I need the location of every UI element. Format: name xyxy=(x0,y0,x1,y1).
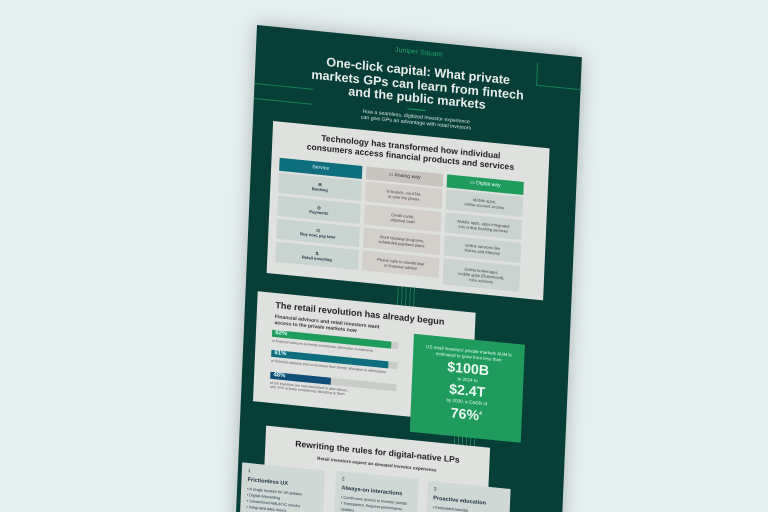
table: Mobile apps, apps integrated xyxy=(458,219,510,229)
callout: AUM growth: US retail investors' private markets AUM is estimated to grow from less than xyxy=(426,344,512,362)
card: proactive education xyxy=(424,481,511,512)
card: frictionless UX: • Digital onboarding xyxy=(247,493,280,500)
callout: AUM growth: by 2030, a CAGR of xyxy=(446,397,487,406)
bar chart: of financial advisors currently incorporate alternative investments xyxy=(272,339,373,353)
table: ⊡ xyxy=(316,228,320,233)
subheading: Retail investors expect an elevated investor experience xyxy=(317,456,437,473)
decorative connector lines xyxy=(453,436,476,456)
table: Service xyxy=(312,164,329,172)
table: ⊞ xyxy=(318,182,322,187)
card: proactive education: Proactive education xyxy=(433,495,486,507)
table: mobile apps (Robinhood), xyxy=(458,270,505,280)
bar chart: of financial advisors plan to increase their clients' allocation to alternatives xyxy=(271,359,386,374)
table: Buy now, pay later xyxy=(300,231,336,240)
table: In branch, via ATM, xyxy=(386,188,421,197)
table: Payments xyxy=(309,209,329,216)
table: into online banking services xyxy=(458,224,508,234)
subheading: Financial advisors and retail investors want xyxy=(275,314,380,330)
table: Banking xyxy=(312,186,328,193)
panel heading: consumers access financial products and services xyxy=(307,141,514,171)
heading: The retail revolution has already begun xyxy=(275,300,445,327)
table: Credit cards, xyxy=(391,212,414,219)
table: online account access xyxy=(464,201,504,210)
bar chart: 92% xyxy=(275,330,287,337)
table: Online services like xyxy=(465,242,500,251)
brand logo: Juniper Square xyxy=(395,47,443,58)
table: Mobile apps, xyxy=(473,197,496,204)
callout: AUM growth: in 2024 to xyxy=(458,376,478,383)
table: physical cash xyxy=(390,217,415,224)
callout: AUM growth: 76%4 xyxy=(450,404,482,423)
callout: AUM growth: $2.4T xyxy=(449,381,486,400)
table: or financial advisor xyxy=(384,263,418,271)
subheading: access to the private markets now xyxy=(274,320,357,334)
panel heading: Technology has transformed how individual xyxy=(321,133,501,161)
callout: AUM growth xyxy=(410,334,525,443)
callout: AUM growth: $100B xyxy=(447,358,489,378)
subtitle: How a seamless, digitized investor experience xyxy=(362,109,470,125)
title: and the public markets xyxy=(348,84,486,112)
bar chart: with 25% actively considering allocating to them xyxy=(270,385,345,396)
title xyxy=(311,55,524,112)
card: frictionless UX: Frictionless UX xyxy=(247,477,288,487)
table xyxy=(275,158,524,292)
panel: technology table xyxy=(267,121,550,300)
table: Phone calls to stockbroker xyxy=(377,257,425,267)
card: always-on interactions: • Continuous access to investor portals xyxy=(341,495,407,506)
table: ▭ Analog way xyxy=(388,172,421,181)
card: frictionless UX: • A single location for all updates xyxy=(247,487,302,496)
panel: digital-native LPs xyxy=(260,426,490,512)
document xyxy=(234,25,582,512)
table: scheduled payment plans xyxy=(379,239,425,248)
table: or over the phone xyxy=(388,194,420,202)
decorative corner lines xyxy=(254,83,313,105)
table: ◎ xyxy=(317,205,321,210)
card: frictionless UX: • Streamlined AML/KYC checks xyxy=(247,499,300,508)
table: Online brokerages, xyxy=(464,266,499,274)
card: frictionless UX xyxy=(238,462,325,512)
table: ▭ Digital way xyxy=(470,180,501,189)
table: Klarna and Afterpay xyxy=(464,247,500,256)
card: always-on interactions: 2 xyxy=(342,476,345,483)
bar chart xyxy=(270,330,398,396)
bar chart: 91% xyxy=(274,350,287,357)
card: frictionless UX: 1 xyxy=(248,468,251,474)
heading: Rewriting the rules for digital-native LPs xyxy=(295,439,460,465)
table: ⇅ xyxy=(315,251,319,256)
bar chart: of US investors are now interested in alternatives, xyxy=(270,381,348,393)
title: One-click capital: What private xyxy=(326,55,510,87)
decorative connector lines xyxy=(397,286,418,308)
title: markets GPs can learn from fintech xyxy=(311,67,524,102)
table: Store layaway programs, xyxy=(379,234,424,243)
card: always-on interactions xyxy=(332,471,419,512)
card: proactive education: 3 xyxy=(433,486,437,493)
subtitle: can give GPs an advantage with retail investors xyxy=(361,115,471,132)
table: Retail investing xyxy=(302,254,332,262)
card: always-on interactions: Always-on interactions xyxy=(341,485,402,497)
panel: retail revolution xyxy=(253,291,476,423)
bar chart: 48% xyxy=(273,372,286,379)
table: robo advisors xyxy=(469,276,493,284)
